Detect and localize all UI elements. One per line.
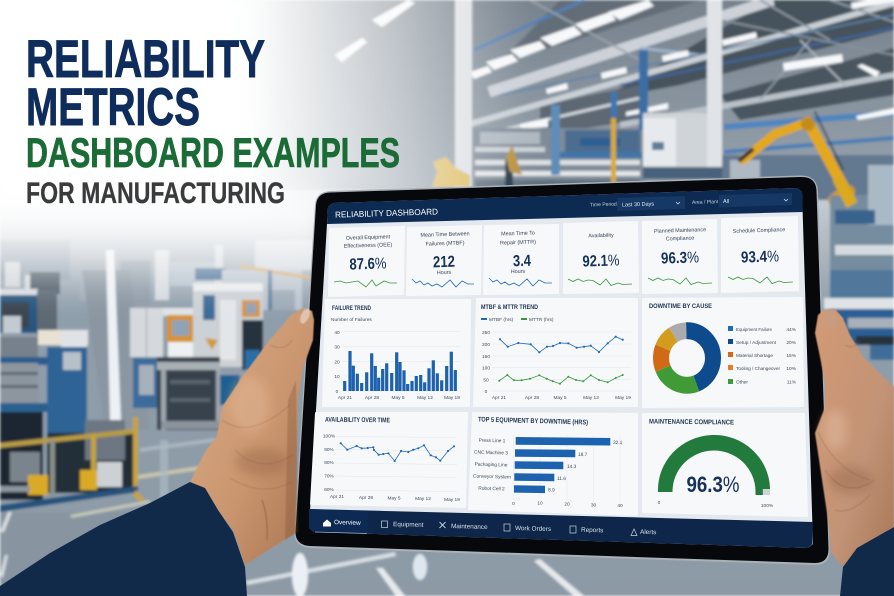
line chart bbox=[482, 330, 631, 401]
horizontal bar chart: 20 bbox=[564, 502, 570, 508]
line chart: 150 bbox=[482, 354, 490, 360]
left hand bbox=[190, 307, 314, 565]
availability line chart: 90% bbox=[324, 447, 335, 453]
availability line chart: May 12 bbox=[415, 496, 431, 502]
roof trusses bbox=[470, 0, 894, 152]
failure bar chart: Apr 21 bbox=[338, 395, 352, 401]
donut legend: 20% bbox=[786, 340, 797, 346]
background worker in yellow bbox=[432, 157, 470, 187]
panel: downtime by cause: DOWNTIME BY CAUSE bbox=[649, 303, 712, 310]
donut legend: 11% bbox=[787, 380, 797, 386]
line chart: May 5 bbox=[553, 395, 567, 401]
failure bar chart: 40 bbox=[334, 330, 340, 336]
kpi card: MTBF: Failures (MTBF) bbox=[425, 240, 465, 248]
availability line chart: 80% bbox=[324, 460, 335, 466]
tablet body bbox=[294, 175, 830, 565]
donut legend: 44% bbox=[786, 327, 797, 333]
gauge chart: 0 bbox=[658, 500, 661, 506]
donut legend: Setup / Adjustment bbox=[736, 340, 777, 346]
legend: MTTR (hrs) bbox=[529, 317, 554, 323]
failure bar chart: May 19 bbox=[444, 395, 460, 401]
horizontal bar chart bbox=[473, 435, 623, 509]
right backdrop bbox=[830, 195, 894, 290]
nav: work orders bbox=[504, 524, 551, 533]
availability line chart: May 19 bbox=[444, 497, 460, 503]
left sleeve bbox=[0, 482, 247, 596]
horizontal bar chart: 10 bbox=[537, 500, 543, 506]
nav: work orders: Work Orders bbox=[515, 525, 551, 533]
time period filter bbox=[590, 196, 685, 211]
kpi card: OEE: Effectiveness (OEE) bbox=[344, 242, 393, 250]
kpi card: schedule compliance: Schedule Compliance bbox=[733, 227, 785, 235]
nav: maintenance: Maintenance bbox=[451, 523, 488, 531]
legend bbox=[481, 317, 554, 323]
area plant filter: All bbox=[723, 199, 729, 205]
horizontal bar chart: Packaging Line bbox=[475, 462, 508, 468]
availability line chart: 100% bbox=[323, 434, 336, 440]
navigation bar bbox=[309, 509, 813, 548]
line chart: 50 bbox=[483, 378, 489, 384]
donut legend: 10% bbox=[786, 366, 797, 372]
failure bar chart: 0 bbox=[336, 389, 339, 395]
yellow safety rail bbox=[0, 429, 133, 448]
line chart: Apr 21 bbox=[492, 395, 506, 401]
kpi card: planned maintenance compliance: 96.3% bbox=[661, 249, 699, 268]
panel: failure trend: Number of Failures bbox=[331, 317, 372, 323]
failure bar chart: May 5 bbox=[391, 395, 405, 401]
kpi card: MTTR: Hours bbox=[511, 269, 526, 275]
panel: maintenance compliance: MAINTENANCE COMPLIANCE bbox=[649, 418, 734, 427]
availability line chart bbox=[323, 434, 460, 503]
kpi card: availability: Availability bbox=[588, 233, 614, 239]
right sleeve bbox=[840, 527, 894, 596]
kpi card: schedule compliance: 93.4% bbox=[741, 248, 779, 267]
horizontal bar chart: 8.9 bbox=[548, 487, 555, 494]
availability line chart: Apr 21 bbox=[330, 494, 344, 500]
failure bar chart: 20 bbox=[334, 360, 340, 366]
failure bar chart bbox=[334, 330, 460, 401]
panel: failure trend bbox=[323, 300, 470, 406]
kpi card: MTBF: Hours bbox=[437, 270, 452, 276]
nav: equipment: Equipment bbox=[393, 521, 424, 529]
availability line chart: 60% bbox=[324, 487, 335, 493]
kpi card: OEE: Overall Equipment bbox=[346, 234, 391, 242]
donut legend: 15% bbox=[786, 353, 797, 359]
kpi card: planned maintenance compliance: Planned Maintenance bbox=[654, 227, 706, 235]
time period filter: Time Period bbox=[590, 202, 617, 208]
horizontal bar chart: 30 bbox=[591, 502, 596, 508]
donut chart bbox=[661, 331, 713, 385]
line chart: 100 bbox=[482, 366, 490, 372]
line chart: 200 bbox=[482, 342, 490, 348]
title: METRICS bbox=[26, 78, 200, 137]
failure bar chart: 30 bbox=[334, 344, 340, 350]
line chart: May 12 bbox=[583, 395, 599, 401]
kpi card: OEE: 87.6% bbox=[349, 255, 387, 274]
panel: MTBF and MTTR trend: MTBF & MTTR TREND bbox=[481, 304, 538, 311]
gauge chart: 100% bbox=[761, 503, 774, 509]
kpi card: planned maintenance compliance: Compliance bbox=[666, 236, 694, 242]
gauge chart bbox=[658, 435, 774, 509]
failure bar chart: May 12 bbox=[417, 395, 433, 401]
kpi card: MTTR: Mean Time To bbox=[501, 230, 535, 238]
dark ceiling bays bbox=[500, 0, 700, 62]
line chart: 0 bbox=[485, 389, 488, 395]
availability line chart: May 5 bbox=[387, 496, 401, 502]
header bar bbox=[327, 188, 803, 224]
failure bar chart: 10 bbox=[334, 374, 340, 380]
kpi card: MTBF: Mean Time Between bbox=[420, 231, 470, 239]
donut legend: Other bbox=[736, 380, 748, 386]
donut legend: Equipment Failure bbox=[736, 327, 772, 333]
area plant filter: Area / Plant bbox=[692, 199, 719, 206]
line chart: May 19 bbox=[615, 395, 631, 401]
horizontal bar chart: Press Line 1 bbox=[479, 438, 506, 444]
building columns bbox=[455, 0, 472, 190]
left machines bbox=[0, 293, 37, 333]
failure bar chart: Apr 28 bbox=[365, 395, 379, 401]
machine cluster bbox=[130, 308, 163, 357]
panel: availability over time bbox=[311, 413, 467, 507]
far haze machines bbox=[0, 240, 315, 310]
availability line chart: 70% bbox=[324, 474, 335, 480]
title: FOR MANUFACTURING bbox=[26, 177, 285, 210]
white fade behind title bbox=[0, 0, 530, 300]
kpi card: OEE bbox=[329, 227, 404, 296]
horizontal bar chart: 14.3 bbox=[567, 464, 577, 470]
kpi card: MTBF: 212 bbox=[433, 254, 455, 271]
panel: failure trend: FAILURE TREND bbox=[332, 305, 371, 312]
horizontal bar chart: Conveyor System bbox=[473, 473, 511, 481]
kpi card: MTTR: Repair (MTTR) bbox=[500, 239, 536, 247]
nav: overview: Overview bbox=[334, 519, 361, 527]
line chart: Apr 28 bbox=[525, 395, 539, 401]
title bbox=[26, 30, 400, 210]
nav: alerts bbox=[631, 529, 656, 536]
kpi card: MTTR bbox=[484, 225, 558, 294]
panel: availability over time: AVAILABILITY OVER TIME bbox=[325, 417, 390, 424]
gauge chart: 96.3% bbox=[686, 472, 740, 497]
kpi card: availability: 92.1% bbox=[582, 252, 620, 271]
donut legend bbox=[728, 326, 797, 386]
horizontal bar chart: 32.1 bbox=[613, 440, 623, 446]
mid machinery bbox=[472, 128, 644, 190]
nav: reports: Reports bbox=[581, 527, 603, 534]
kpi card: planned maintenance compliance bbox=[643, 220, 717, 293]
nav: alerts: Alerts bbox=[640, 529, 656, 536]
horizontal bar chart: 11.6 bbox=[557, 476, 566, 482]
availability line chart: Apr 28 bbox=[359, 495, 373, 501]
title: DASHBOARD EXAMPLES bbox=[26, 129, 400, 176]
title: RELIABILITY bbox=[26, 30, 265, 89]
time period filter: Last 30 Days bbox=[622, 201, 654, 209]
panel: maintenance compliance bbox=[643, 414, 807, 516]
panel: top 5 equipment by downtime bbox=[469, 413, 637, 515]
nav: maintenance bbox=[440, 522, 488, 531]
horizontal bar chart: 18.7 bbox=[578, 452, 588, 458]
robot arm bbox=[740, 112, 848, 200]
legend: MTBF (hrs) bbox=[489, 317, 514, 323]
right hand bbox=[815, 308, 894, 567]
horizontal bar chart: Robot Cell 2 bbox=[478, 486, 505, 492]
kpi card: MTTR: 3.4 bbox=[513, 253, 531, 270]
panel: top 5 equipment by downtime: TOP 5 EQUIPMENT BY DOWNTIME (HRS) bbox=[478, 416, 588, 427]
horizontal bar chart: 0 bbox=[512, 501, 515, 507]
skylights bbox=[335, 0, 894, 129]
dashboard heading: RELIABILITY DASHBOARD bbox=[335, 206, 438, 220]
donut legend: Material Shortage bbox=[736, 353, 773, 359]
donut legend: Tooling / Changeover bbox=[736, 366, 780, 372]
horizontal bar chart: 40 bbox=[617, 503, 623, 509]
dashboard screen bbox=[309, 188, 813, 548]
kpi card: MTBF bbox=[407, 226, 481, 295]
area plant filter bbox=[692, 193, 792, 208]
panel: MTBF and MTTR trend bbox=[474, 299, 637, 406]
horizontal bar chart: CNC Machine 3 bbox=[474, 450, 508, 456]
floor markings bbox=[138, 466, 200, 479]
line chart: 250 bbox=[482, 330, 490, 336]
central aisle bbox=[82, 270, 150, 430]
panel: downtime by cause bbox=[643, 298, 803, 407]
nav: reports bbox=[570, 526, 603, 534]
kpi card: schedule compliance bbox=[722, 217, 798, 292]
kpi card: availability bbox=[564, 222, 638, 293]
